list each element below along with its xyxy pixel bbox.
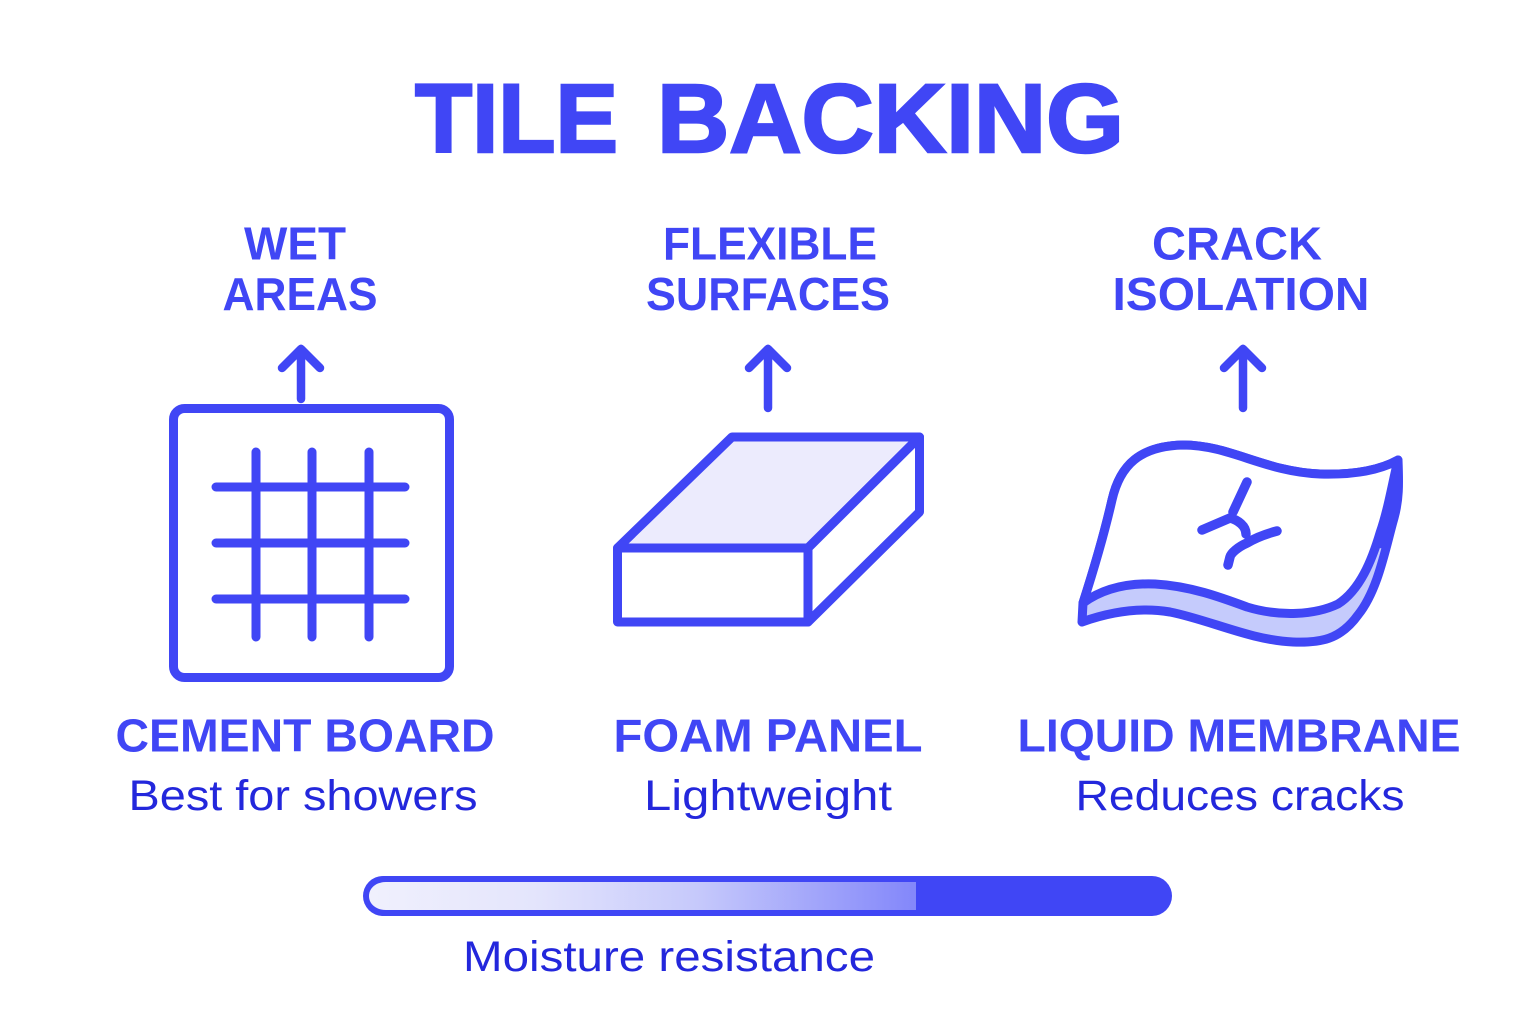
heading: wet areas — [222, 218, 378, 320]
icon: liquid membrane — [1082, 445, 1399, 642]
title — [415, 64, 1124, 173]
label: foam panel — [614, 710, 922, 820]
label: liquid membrane: LIQUID MEMBRANE — [1018, 710, 1460, 762]
heading: wet areas: WET — [244, 218, 346, 270]
icon: cement board mesh — [174, 408, 450, 678]
label: liquid membrane: Reduces cracks — [1076, 772, 1404, 820]
heading: crack isolation — [1112, 218, 1370, 320]
label: cement board: Best for showers — [128, 772, 478, 820]
arrow: flexible surfaces — [749, 349, 787, 408]
moisture resistance bar — [363, 876, 1172, 916]
icon: foam panel — [618, 437, 920, 622]
label: cement board — [116, 710, 494, 820]
heading: flexible surfaces: FLEXIBLE — [663, 218, 877, 270]
title: BACKING — [657, 64, 1124, 173]
label: foam panel: Lightweight — [644, 772, 892, 820]
label: liquid membrane — [1018, 710, 1460, 820]
arrow: wet areas — [282, 349, 320, 399]
bar label: Moisture resistance — [463, 933, 875, 981]
heading: flexible surfaces — [646, 218, 890, 320]
label: cement board: CEMENT BOARD — [116, 710, 494, 762]
heading: flexible surfaces: SURFACES — [646, 268, 890, 320]
title: TILE — [415, 64, 618, 173]
arrow: crack isolation — [1224, 349, 1262, 408]
heading: wet areas: AREAS — [222, 268, 378, 320]
heading: crack isolation: ISOLATION — [1112, 268, 1370, 320]
heading: crack isolation: CRACK — [1152, 218, 1322, 270]
label: foam panel: FOAM PANEL — [614, 710, 922, 762]
